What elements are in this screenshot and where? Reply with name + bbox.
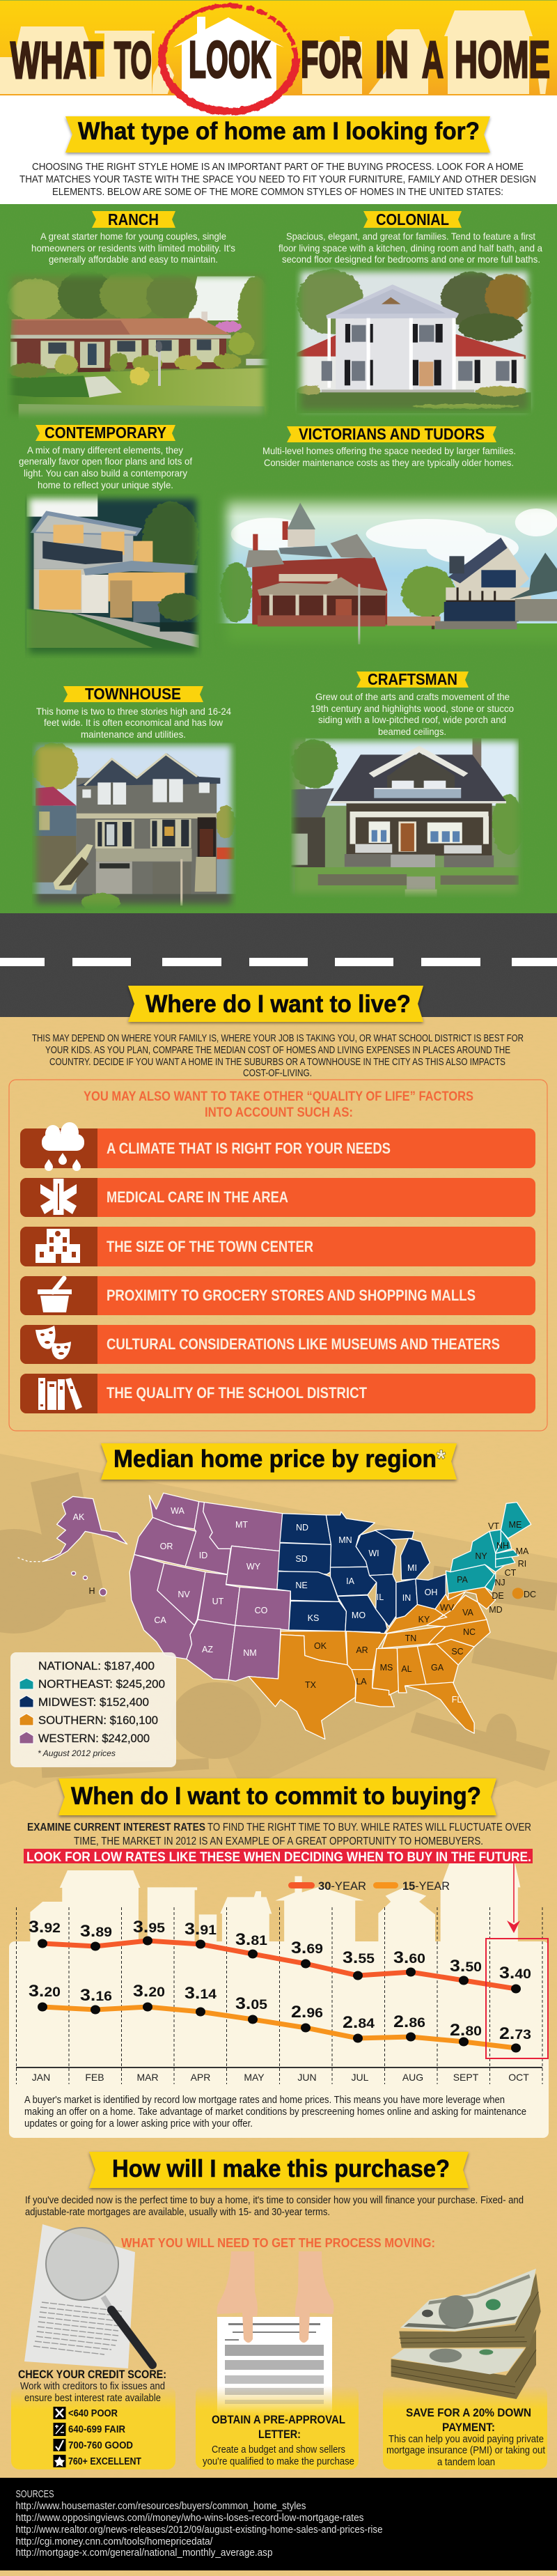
panel: quality of life factors: [9, 1080, 547, 1431]
text: ranch description: homeowners or residents with limited mobility. It's: [31, 242, 235, 254]
factor: grocery and shopping: [20, 1276, 535, 1315]
map labels: ND: [296, 1523, 308, 1533]
map region: northeast states: [446, 1503, 531, 1593]
values: 15-year: 3.20: [29, 1982, 61, 2001]
month labels: JUL: [352, 2072, 369, 2083]
text: townhouse description: This home is two to three stories high and 16-24: [36, 706, 231, 717]
month labels: APR: [191, 2072, 210, 2083]
title: [10, 31, 550, 89]
values: 15-year: 3.05: [235, 1994, 267, 2013]
photo: victorian and tudor homes: [213, 488, 557, 649]
skyline silhouettes: [0, 10, 547, 95]
text: contemporary description: A mix of many different elements, they: [27, 444, 183, 456]
line: 30-year rate: [38, 1937, 521, 1994]
map labels: NE: [295, 1581, 308, 1590]
factor: town center: THE SIZE OF THE TOWN CENTER: [107, 1238, 313, 1255]
values: 15-year: 2.80: [450, 2021, 482, 2040]
map labels: OK: [314, 1641, 327, 1651]
month labels: MAR: [136, 2072, 159, 2083]
title: A: [422, 31, 444, 88]
text: ranch description: generally affordable and easy to maintain.: [49, 254, 218, 265]
map labels: NH: [496, 1541, 509, 1551]
values: 30-year: 3.81: [235, 1930, 267, 1949]
values: 15-year: 2.96: [291, 2003, 323, 2022]
text: craftsman description: siding with a low-pitched roof, wide porch and: [318, 714, 506, 725]
panel: pre-approval letter: [196, 2251, 359, 2469]
panel: check your credit score: Work with creditors to fix issues and: [20, 2381, 165, 2392]
map labels: KY: [418, 1615, 430, 1624]
month labels: MAY: [244, 2072, 265, 2083]
month labels: [32, 2072, 529, 2083]
panel: save for down payment: [383, 2269, 547, 2469]
values: 30-year: 3.91: [185, 1920, 217, 1939]
map labels: AL: [401, 1664, 412, 1674]
illustration: credit report and magnifying glass: [24, 2224, 152, 2368]
values: 30-year: 3.40: [499, 1964, 531, 1983]
map labels: PA: [457, 1575, 469, 1585]
text: victorians description: Multi-level homes offering the space needed by larger families.: [262, 445, 516, 456]
legend: regional median prices: WESTERN: $242,000: [38, 1732, 150, 1745]
values: 15-year: 2.84: [343, 2013, 375, 2032]
map labels: CT: [505, 1568, 517, 1578]
heading: what you will need: WHAT YOU WILL NEED TO GET THE PROCESS MOVING:: [121, 2235, 435, 2250]
map region: western states: [18, 1493, 290, 1681]
map labels: SD: [295, 1554, 308, 1564]
map labels: NC: [463, 1627, 476, 1637]
text: interest rates intro: EXAMINE CURRENT INTEREST RATES: [27, 1822, 205, 1833]
map labels: OR: [160, 1542, 173, 1551]
values: 30-year: 3.69: [291, 1939, 323, 1957]
red circle: [162, 6, 296, 111]
map labels: TN: [405, 1634, 416, 1643]
footer: sources: http://www.housemaster.com/resources/buyers/common_home_styles: [15, 2501, 306, 2512]
text: ranch description: [31, 231, 235, 265]
credit rating: excellent: [53, 2455, 141, 2467]
photo: craftsman home: [290, 737, 524, 897]
intro paragraph: ELEMENTS. BELOW ARE SOME OF THE MORE COMMON STYLES OF HOMES IN THE UNITED STATES:: [52, 186, 503, 198]
values: 15-year: 3.20: [133, 1982, 165, 2001]
map labels: OH: [425, 1588, 437, 1597]
map labels: WV: [440, 1603, 455, 1613]
map labels: MT: [235, 1520, 248, 1530]
factor: grocery and shopping: PROXIMITY TO GROCERY STORES AND SHOPPING MALLS: [107, 1287, 476, 1304]
text: contemporary description: light. You can also build a contemporary: [24, 467, 187, 479]
text: townhouse description: maintenance and utilities.: [81, 729, 186, 740]
map labels: ID: [199, 1551, 207, 1560]
map labels: IA: [346, 1576, 355, 1586]
text: buyer's market: [24, 2095, 526, 2129]
factor: town center: [20, 1227, 535, 1266]
text: craftsman description: Grew out of the arts and crafts movement of the: [315, 691, 510, 702]
map labels: GA: [431, 1663, 444, 1673]
values: 15-year: 3.14: [185, 1984, 217, 2003]
panel: pre-approval letter: Create a budget and show sellers: [212, 2444, 345, 2455]
chart legend: 30-YEAR: [318, 1879, 366, 1893]
panel: save for down payment: mortgage insurance (PMI) or taking out: [386, 2445, 545, 2456]
legend: regional median prices: MIDWEST: $152,400: [38, 1696, 149, 1709]
panel: grass background: [0, 204, 557, 913]
credit rating: good: [53, 2439, 133, 2451]
text: colonial description: [278, 231, 542, 265]
text: victorians description: Consider maintenance costs as they are typically older homes.: [264, 457, 514, 468]
map region: southern states: [249, 1587, 524, 1739]
map labels: TX: [305, 1680, 317, 1690]
text: financing paragraph: adjustable-rate mortgages are available, usually with 15- and 30-year terms.: [25, 2206, 330, 2218]
white house in circle: [173, 17, 284, 95]
map labels: DC: [524, 1590, 536, 1599]
text: financing paragraph: [25, 2194, 524, 2218]
map labels: MI: [407, 1563, 417, 1573]
map labels: VT: [488, 1521, 499, 1531]
legend: regional median prices: [10, 1652, 176, 1767]
map labels: SC: [451, 1647, 464, 1656]
title: TO: [114, 31, 152, 89]
highlight box: october: [486, 1939, 548, 2058]
text: colonial description: floor living space with a kitchen, dining room and half bath, and a: [278, 242, 542, 254]
factor: school district: [20, 1374, 535, 1413]
map labels: WA: [171, 1506, 185, 1516]
footer: sources: http://www.realtor.org/news-releases/2012/09/august-existing-home-sales-and-prices-rise: [15, 2524, 383, 2536]
title: IN: [375, 31, 409, 88]
legend: regional median prices: NATIONAL: $187,400: [38, 1660, 155, 1673]
house silhouettes: [30, 1863, 520, 1942]
factor: medical care: MEDICAL CARE IN THE AREA: [107, 1188, 288, 1206]
label: ranch: [92, 210, 175, 228]
chart legend: [288, 1879, 450, 1893]
month labels: JAN: [32, 2072, 50, 2083]
title: LOOK: [189, 31, 271, 88]
panel: save for down payment: SAVE FOR A 20% DOWN: [406, 2407, 531, 2419]
text: craftsman description: beamed ceilings.: [378, 726, 446, 737]
values: 30-year: [29, 1918, 531, 1983]
month labels: JUN: [297, 2072, 317, 2083]
values: 30-year: 3.55: [343, 1948, 375, 1967]
text: where to live paragraph: COST-OF-LIVING.: [243, 1068, 312, 1079]
panel: interest rate chart: [9, 1863, 549, 2138]
footer: sources: SOURCES: [15, 2489, 54, 2500]
panel: pre-approval letter: OBTAIN A PRE-APPROVAL: [212, 2414, 345, 2426]
map labels: IL: [377, 1592, 384, 1602]
map labels: NV: [178, 1590, 190, 1599]
values: 15-year: 3.16: [80, 1986, 112, 2005]
label: townhouse: TOWNHOUSE: [85, 685, 181, 703]
text: colonial description: Spacious, elegant, and great for families. Tend to feature a first: [286, 231, 535, 242]
values: 15-year: 2.86: [393, 2012, 425, 2031]
section banner: how will I make this purchase: [89, 2152, 469, 2188]
map labels: UT: [212, 1597, 224, 1606]
panel: pre-approval letter: LETTER:: [258, 2428, 301, 2441]
section banner: where do I want to live: Where do I want to live?: [146, 991, 411, 1018]
map labels: H: [88, 1586, 95, 1596]
heading: INTO ACCOUNT SUCH AS:: [205, 1105, 353, 1120]
line: 15-year rate: [38, 2002, 521, 2052]
section banner: median home price by region: Median home price by region*: [113, 1445, 446, 1473]
photo: colonial home: [295, 267, 536, 418]
map labels: MN: [338, 1535, 352, 1545]
footer: sources: http://www.opposingviews.com/i/money/who-wins-loses-record-low-mortgage-rates: [15, 2513, 363, 2524]
text: contemporary description: home to reflect your unique style.: [38, 479, 173, 490]
arrow to october: [507, 1863, 520, 1933]
photo: townhouse: [32, 742, 236, 911]
map labels: WY: [246, 1562, 261, 1572]
values: 30-year: 3.60: [393, 1948, 425, 1967]
text: colonial description: second floor designed for bedrooms and one or more full baths.: [282, 254, 540, 265]
intro paragraph: [19, 161, 536, 198]
values: 30-year: 3.92: [29, 1918, 61, 1937]
map labels: FL: [452, 1695, 462, 1705]
map labels: VA: [462, 1608, 474, 1617]
label: craftsman: CRAFTSMAN: [368, 670, 457, 688]
map labels: RI: [518, 1559, 526, 1569]
map labels: DE: [492, 1591, 504, 1601]
text: craftsman description: [311, 691, 514, 737]
map region: midwest states: [277, 1512, 446, 1637]
text: interest rates intro: TIME, THE MARKET IN 2012 IS AN EXAMPLE OF A GREAT OPPORTUNITY TO HOMEBUYERS.: [74, 1836, 483, 1847]
panel: pre-approval letter: you're qualified to make the purchase: [203, 2456, 354, 2467]
map labels: CA: [154, 1615, 166, 1625]
section banner: how will I make this purchase: How will I make this purchase?: [112, 2155, 450, 2182]
map labels: ME: [509, 1520, 521, 1530]
illustration: hands holding letter: [217, 2251, 334, 2415]
text: contemporary description: [19, 444, 192, 490]
label: colonial: COLONIAL: [376, 210, 449, 228]
illustration: stacks of money: [391, 2269, 541, 2399]
page background: tan paper: [0, 1017, 557, 2576]
text: interest rates intro: [27, 1822, 531, 1847]
panel: check your credit score: CHECK YOUR CREDIT SCORE:: [18, 2368, 166, 2381]
title: WHAT: [10, 31, 103, 89]
text: contemporary description: generally favor open floor plans and lots of: [19, 456, 192, 467]
credit rating: excellent: 760+ EXCELLENT: [68, 2456, 141, 2467]
map: US regions: [18, 1493, 536, 1739]
road: [0, 913, 557, 1017]
text: victorians description: [262, 445, 516, 468]
footer: sources: [0, 2478, 557, 2570]
map labels: NJ: [494, 1578, 505, 1588]
map labels: WI: [368, 1549, 379, 1558]
values: 15-year: [29, 1982, 531, 2043]
text: townhouse description: feet wide. It is often economical and has low: [44, 717, 223, 728]
factor: climate: A CLIMATE THAT IS RIGHT FOR YOUR NEEDS: [107, 1140, 391, 1157]
label: victorians and tudors: VICTORIANS AND TUDORS: [299, 425, 485, 443]
title: FOR: [301, 31, 362, 88]
footer: sources: http://mortgage-x.com/general/national_monthly_average.asp: [15, 2547, 273, 2559]
panel: save for down payment: a tandem loan: [437, 2457, 495, 2468]
credit rating: poor: [53, 2407, 118, 2419]
values: 30-year: 3.89: [80, 1922, 112, 1941]
credit rating: poor: <640 POOR: [68, 2408, 118, 2419]
month labels: OCT: [508, 2072, 529, 2083]
section banner: what type of home: What type of home am I looking for?: [78, 118, 480, 145]
footer: sources: http://cgi.money.cnn.com/tools/homepricedata/: [15, 2536, 213, 2547]
credit rating: fair: [53, 2423, 125, 2436]
values: 30-year: 3.50: [450, 1957, 482, 1976]
map labels: IN: [402, 1593, 411, 1603]
text: ranch description: A great starter home for young couples, single: [40, 231, 226, 242]
photo: ranch home: [7, 273, 269, 417]
map labels: AZ: [202, 1645, 213, 1654]
header: skyline with title: [0, 0, 557, 111]
label: contemporary: CONTEMPORARY: [45, 424, 166, 442]
month labels: AUG: [402, 2072, 423, 2083]
text: buyer's market: A buyer's market is identified by record low mortgage rates and home prices. This means you have more leverage when: [24, 2095, 505, 2106]
map labels: MA: [516, 1546, 529, 1556]
map labels: MO: [352, 1611, 366, 1620]
panel: check your credit score: ensure best interest rate available: [24, 2393, 161, 2404]
money background: [0, 1454, 557, 1790]
values: 30-year: 3.95: [133, 1918, 165, 1937]
legend: regional median prices: SOUTHERN: $160,100: [38, 1714, 158, 1727]
map labels: KS: [308, 1613, 319, 1623]
map labels: CO: [255, 1606, 268, 1615]
map labels: AR: [356, 1645, 368, 1655]
panel: save for down payment: PAYMENT:: [442, 2421, 495, 2434]
photo: contemporary home: [25, 493, 203, 658]
chart legend: 15-YEAR: [402, 1879, 450, 1893]
text: buyer's market: updates or going for a lower asking price with your offer.: [24, 2118, 253, 2129]
month labels: FEB: [85, 2072, 104, 2083]
map labels: AK: [73, 1512, 85, 1522]
panel: check your credit score: [11, 2224, 175, 2469]
legend: regional median prices: NORTHEAST: $245,200: [38, 1678, 165, 1691]
section banner: when do I want to commit: When do I want to commit to buying?: [71, 1783, 481, 1810]
factor: culture: [20, 1325, 535, 1364]
credit rating: fair: 640-699 FAIR: [68, 2424, 125, 2435]
text: craftsman description: 19th century and highlights wood, stone or stucco: [311, 703, 514, 714]
label: ranch: RANCH: [108, 210, 159, 228]
factor: climate: [20, 1122, 535, 1171]
map labels: LA: [356, 1677, 367, 1686]
values: 15-year: 2.73: [499, 2024, 531, 2043]
text: where to live paragraph: [32, 1033, 524, 1079]
map labels: NM: [243, 1648, 257, 1658]
text: townhouse description: [36, 706, 231, 740]
heading: YOU MAY ALSO WANT TO TAKE OTHER “QUALITY OF LIFE” FACTORS: [84, 1089, 473, 1104]
map labels: MS: [380, 1663, 393, 1673]
panel: save for down payment: This can help you avoid paying private: [389, 2434, 544, 2445]
month labels: SEPT: [453, 2072, 479, 2083]
map labels: NY: [475, 1551, 487, 1561]
credit rating: good: 700-760 GOOD: [68, 2440, 133, 2451]
factor: school district: THE QUALITY OF THE SCHOOL DISTRICT: [107, 1384, 367, 1402]
map labels: MD: [489, 1605, 503, 1615]
map labels: [73, 1506, 536, 1705]
heading: [84, 1089, 473, 1120]
factor: medical care: [20, 1178, 535, 1217]
legend: regional median prices: * August 2012 prices: [38, 1750, 116, 1758]
